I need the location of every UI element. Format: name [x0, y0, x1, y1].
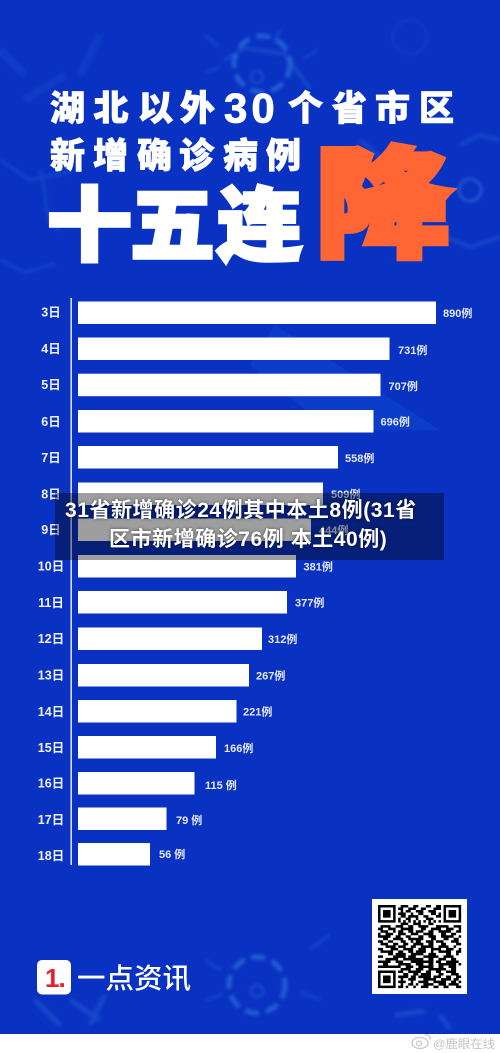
title line 1: 外	[180, 90, 215, 128]
row: 5日 707例	[41, 374, 418, 396]
QR code	[372, 899, 467, 994]
title line 1: 区	[419, 90, 454, 128]
row: 6日 696例	[41, 410, 410, 432]
row: 9日 444例: 9日	[41, 523, 61, 537]
background lighter chart shading	[250, 325, 440, 430]
logo badge	[37, 960, 71, 994]
row: 16日 115例: 115 例	[205, 778, 237, 792]
row: 12日 312例: 12日	[38, 632, 64, 646]
row: 10日 381例	[38, 555, 333, 578]
row: 15日 166例: 15日	[38, 741, 64, 755]
row: 16日 115例: 16日	[38, 776, 64, 790]
row: 6日 696例: 696例	[380, 414, 410, 428]
row: 11日 377例: 377例	[295, 596, 324, 610]
row: 17日 79例: 79 例	[176, 813, 202, 827]
title line 1: 省	[332, 90, 367, 128]
row: 8日 509例: 8日	[41, 488, 61, 502]
title line 2: 增	[93, 137, 128, 176]
title: fifteen consecutive	[47, 182, 302, 271]
title line 1: 湖	[50, 90, 85, 128]
title line 1	[50, 84, 454, 132]
row: 17日 79例: 17日	[38, 813, 64, 827]
row: 3日 890例: 3日	[41, 306, 61, 320]
row: 9日 444例	[41, 518, 348, 541]
row: 7日 558例	[41, 446, 374, 468]
overlay headline line 1: 31省新增确诊24例其中本土8例(31省	[65, 499, 417, 522]
row: 12日 312例	[38, 628, 297, 650]
title line 1: 30	[224, 84, 279, 132]
title: fifteen consecutive: 十	[47, 182, 132, 271]
bar chart	[38, 298, 472, 866]
row: 15日 166例	[38, 736, 253, 758]
row: 3日 890例: 890例	[443, 306, 472, 320]
title line 1: 北	[94, 90, 129, 128]
row: 6日 696例: 6日	[41, 415, 61, 429]
overlay headline line 2: 区市新增确诊76例 本土40例)	[109, 528, 387, 551]
row: 14日 221例	[38, 700, 272, 722]
row: 4日 731例	[41, 338, 427, 360]
logo wordmark: 一点资讯	[77, 963, 191, 994]
row: 4日 731例: 731例	[398, 343, 427, 357]
title: fifteen consecutive: 连	[217, 182, 302, 271]
title line 2: 病	[223, 137, 258, 176]
row: 5日 707例: 707例	[388, 379, 418, 393]
row: 13日 267例: 267例	[256, 668, 285, 682]
logo: 一点资讯	[37, 960, 191, 994]
row: 15日 166例: 166例	[224, 741, 253, 755]
row: 5日 707例: 5日	[41, 378, 61, 392]
watermark icon: weibo	[412, 1035, 430, 1048]
row: 18日 56例: 56 例	[159, 847, 185, 861]
row: 12日 312例: 312例	[268, 632, 297, 646]
headline overlay band	[55, 493, 444, 560]
row: 14日 221例: 14日	[38, 705, 64, 719]
row: 16日 115例	[38, 772, 237, 794]
row: 8日 509例	[41, 482, 360, 505]
row: 9日 444例: 444例	[319, 523, 348, 537]
row: 10日 381例: 381例	[304, 560, 333, 574]
row: 11日 377例	[38, 591, 324, 614]
title line 2: 诊	[179, 137, 215, 176]
row: 11日 377例: 11日	[38, 596, 64, 610]
row: 7日 558例: 558例	[345, 451, 374, 465]
title line 1: 市	[375, 88, 410, 128]
row: 14日 221例: 221例	[243, 704, 272, 718]
title: fifteen consecutive: 五	[130, 182, 215, 271]
row: 18日 56例	[38, 843, 185, 866]
title line 1: 个	[288, 90, 323, 128]
title line 2	[50, 137, 301, 176]
row: 17日 79例	[38, 808, 202, 830]
watermark text: @鹿眼在线	[433, 1036, 495, 1051]
row: 3日 890例	[41, 302, 472, 324]
logo number: 1.	[45, 963, 65, 993]
row: 13日 267例	[38, 664, 285, 686]
chart axis	[70, 298, 72, 865]
title line 2: 例	[266, 137, 301, 176]
row: 10日 381例: 10日	[38, 560, 64, 574]
row: 8日 509例: 509例	[331, 487, 360, 501]
row: 13日 267例: 13日	[38, 668, 64, 682]
title line 2: 确	[137, 137, 172, 176]
row: 7日 558例: 7日	[41, 451, 61, 465]
row: 18日 56例: 18日	[38, 849, 64, 863]
title line 2: 新	[50, 137, 85, 176]
title: decline character in orange: 降	[316, 139, 452, 273]
row: 4日 731例: 4日	[41, 342, 61, 356]
title line 1: 以	[138, 90, 173, 128]
